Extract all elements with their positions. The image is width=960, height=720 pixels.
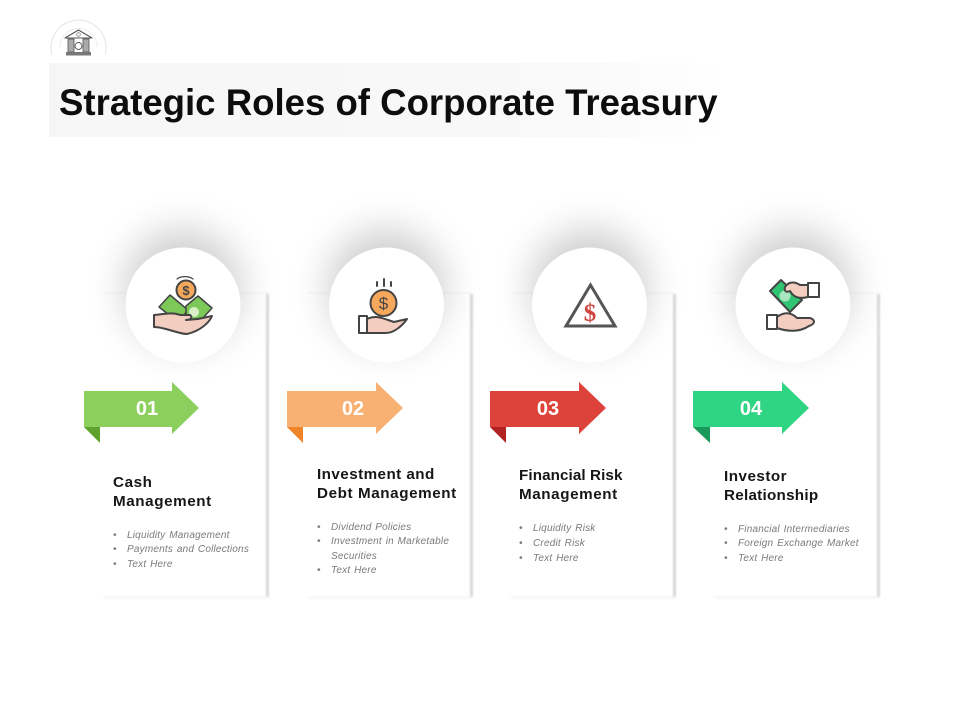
panel: investment and debt management (287, 230, 472, 598)
bullet list: • (519, 538, 523, 549)
bullet list: • (724, 538, 728, 549)
circle shadow (125, 230, 241, 346)
icon circle (532, 248, 647, 362)
bullet list: • (317, 522, 321, 533)
step arrow 01: 01 (136, 398, 158, 420)
bullet list: Text Here (738, 553, 784, 564)
bullet list: • (113, 544, 117, 555)
circle shadow (328, 230, 444, 346)
icon: triangle with dollar (566, 285, 615, 327)
bullet list: Financial Intermediaries (738, 524, 850, 535)
circle shadow (532, 230, 648, 346)
title banner (49, 63, 729, 137)
icon: triangle with dollar: $ (584, 300, 596, 327)
icon circle (736, 248, 850, 362)
step arrow 03: 03 (537, 398, 559, 420)
title: Strategic Roles of Corporate Treasury (59, 82, 718, 123)
bullet list: Investment in Marketable (331, 536, 449, 547)
heading: Management (113, 493, 212, 510)
bullet list: • (724, 553, 728, 564)
heading: Financial Risk (519, 467, 623, 484)
icon: hand with coin: $ (379, 294, 389, 313)
step arrow 03 (490, 382, 606, 443)
bullet list: • (519, 553, 523, 564)
bullet list: Liquidity Risk (533, 523, 596, 534)
logo icon: bank building (51, 20, 106, 56)
icon: two hands exchanging cash (767, 280, 819, 331)
bullet list: • (113, 530, 117, 541)
panel: financial risk management (490, 230, 676, 598)
heading: Relationship (724, 487, 818, 504)
panel: investor relationship (693, 230, 880, 598)
icon circle (329, 248, 444, 362)
bullet list: Securities (331, 551, 377, 562)
bullet list: Foreign Exchange Market (738, 538, 860, 549)
bullet list: • (519, 523, 523, 534)
bullet list: • (113, 559, 117, 570)
bullet list: • (317, 565, 321, 576)
icon: hand with cash (154, 277, 212, 334)
icon: hand with coin (359, 279, 407, 333)
heading: Management (519, 486, 618, 503)
bullet list: • (317, 536, 321, 547)
bullet list: Credit Risk (533, 538, 586, 549)
bullet list: Text Here (127, 559, 173, 570)
bullet list: Text Here (331, 565, 377, 576)
bullet list: • (724, 524, 728, 535)
heading: Investor (724, 468, 787, 485)
bullet list: Payments and Collections (127, 544, 249, 555)
icon circle (126, 248, 240, 362)
bullet list: Text Here (533, 553, 579, 564)
step arrow 02 (287, 382, 403, 443)
icon: hand with cash: $ (182, 283, 190, 298)
step arrow 04: 04 (740, 398, 763, 420)
bullet list: Dividend Policies (331, 522, 411, 533)
circle shadow (735, 230, 851, 346)
bullet list: Liquidity Management (127, 530, 231, 541)
panel: cash management (84, 230, 268, 598)
heading: Debt Management (317, 485, 457, 502)
step arrow 01 (84, 382, 199, 443)
step arrow 04 (693, 382, 809, 443)
heading: Investment and (317, 466, 435, 483)
step arrow 02: 02 (342, 398, 364, 420)
heading: Cash (113, 474, 153, 491)
